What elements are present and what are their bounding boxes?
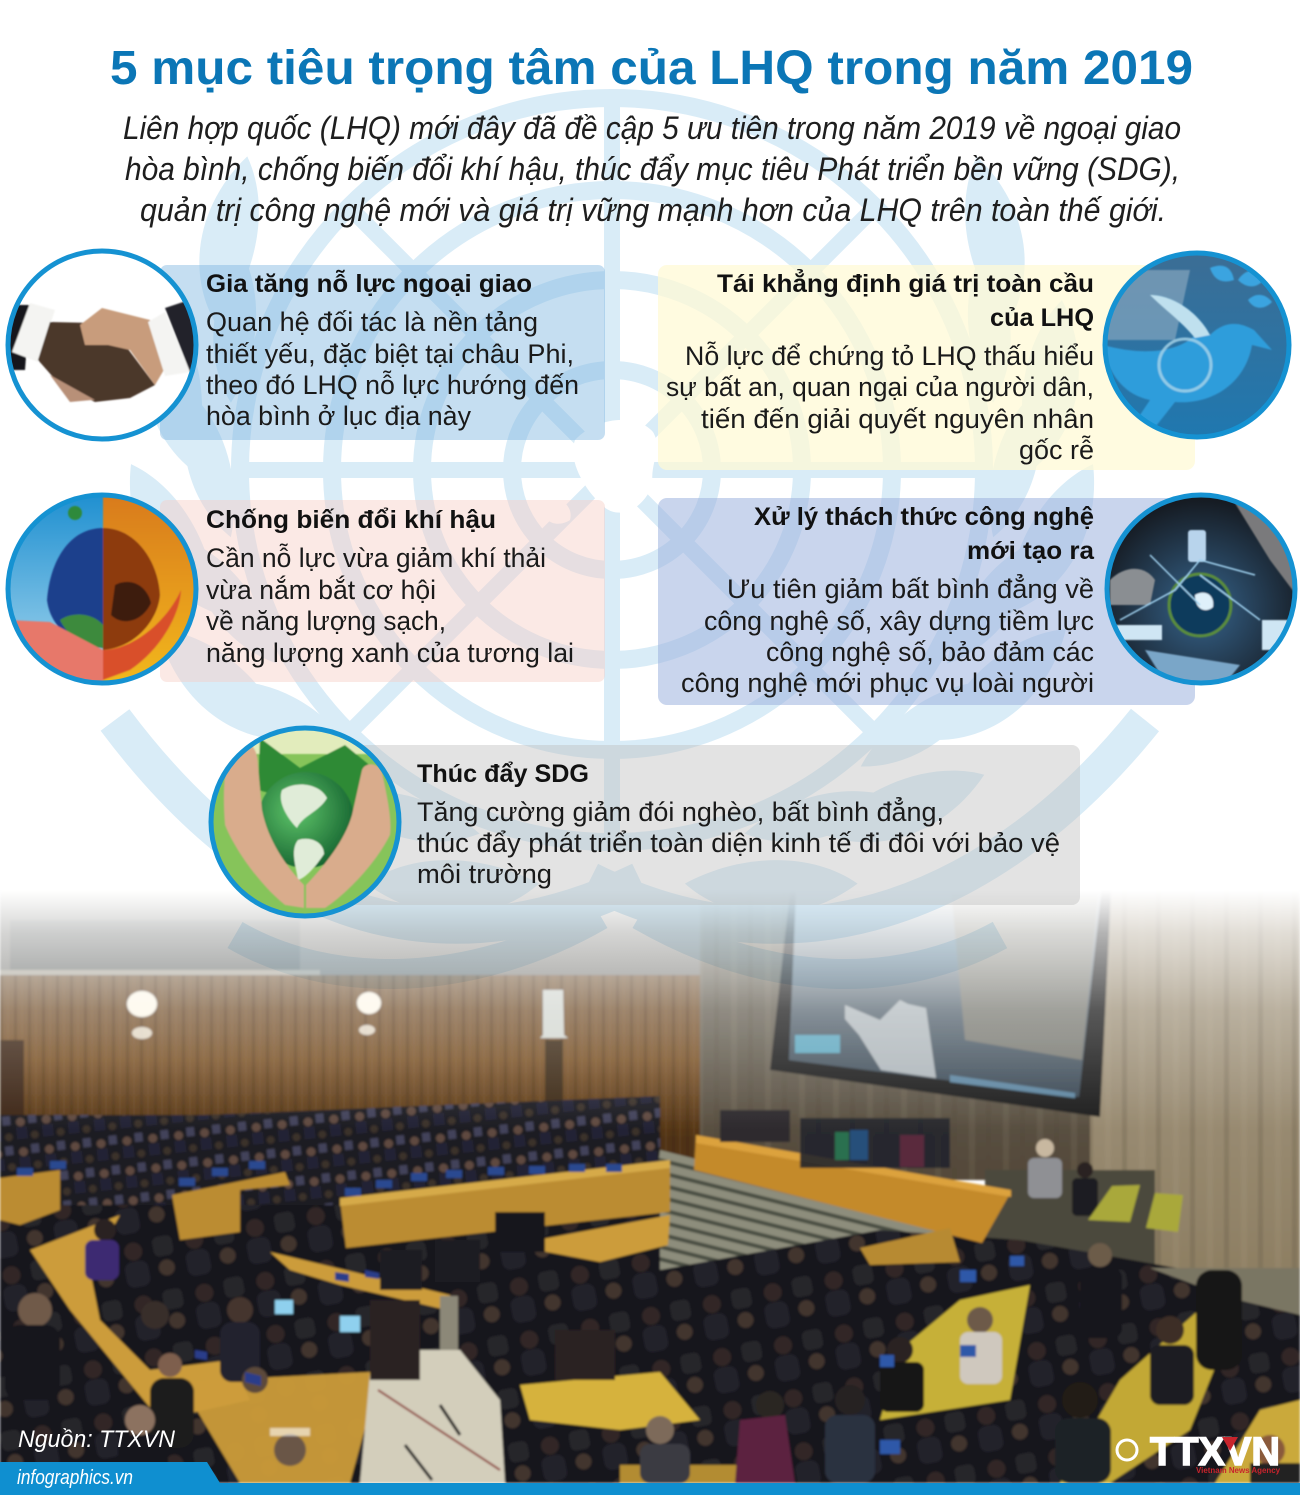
ceiling and balcony xyxy=(0,898,702,976)
heading: mới tạo ra xyxy=(967,537,1095,565)
main crowd base xyxy=(0,1205,660,1483)
seated speaker and lime chairs xyxy=(1028,1139,1183,1232)
intro paragraph xyxy=(123,110,1181,228)
card: Thúc đẩy SDG xyxy=(300,745,1080,905)
body text: vừa nắm bắt cơ hội xyxy=(206,574,436,605)
heading: Thúc đẩy SDG xyxy=(417,760,589,788)
heading: Tái khẳng định giá trị toàn cầu xyxy=(717,267,1094,298)
icon: hands holding green globe xyxy=(211,728,399,916)
head table xyxy=(694,1135,1011,1243)
projection screen xyxy=(770,880,1112,1117)
card: Chống biến đổi khí hậu xyxy=(160,500,605,682)
body text: theo đó LHQ nỗ lực hướng đến xyxy=(206,369,579,400)
footer bar xyxy=(0,1462,1300,1495)
mid left desks xyxy=(30,1215,670,1483)
floor aisle with stripes xyxy=(360,1350,505,1483)
intro paragraph: quản trị công nghệ mới và giá trị vững mạnh hơn của LHQ trên toàn thế giới. xyxy=(140,192,1166,228)
right curtain xyxy=(1090,880,1300,1290)
body text: Tăng cường giảm đói nghèo, bất bình đẳng, xyxy=(417,795,944,827)
back row crowd xyxy=(0,1115,660,1210)
photo: UN conference hall xyxy=(0,880,1300,1483)
card: Gia tăng nỗ lực ngoại giao xyxy=(160,265,605,440)
heading: Gia tăng nỗ lực ngoại giao xyxy=(206,268,532,298)
card: Xử lý thách thức công nghệ mới tạo ra xyxy=(658,498,1195,705)
body text: công nghệ số, bảo đảm các xyxy=(766,637,1094,667)
wood wall xyxy=(0,975,700,1165)
body text xyxy=(681,572,1094,698)
intro paragraph: Liên hợp quốc (LHQ) mới đây đã đề cập 5 ưu tiên trong năm 2019 về ngoại giao xyxy=(123,110,1181,146)
body text: thúc đẩy phát triển toàn diện kinh tế đi đôi với bảo vệ xyxy=(417,828,1060,858)
body text xyxy=(206,307,579,431)
desk monitors xyxy=(17,1161,622,1196)
body text xyxy=(206,542,574,668)
desk side panel xyxy=(440,1296,458,1370)
right wall behind the podium xyxy=(698,902,1092,1182)
background: UN emblem watermark xyxy=(115,95,1145,974)
icon: handshake xyxy=(0,251,205,439)
icon: peace dove xyxy=(1103,253,1289,440)
body text: sự bất an, quan ngại của người dân, xyxy=(666,372,1094,402)
body text: môi trường xyxy=(417,859,552,889)
front desks xyxy=(520,1228,1300,1483)
body text xyxy=(417,795,1060,889)
body text: tiến đến giải quyết nguyên nhân xyxy=(701,404,1094,434)
icon: earth half green half burning xyxy=(8,493,203,688)
card: Tái khẳng định giá trị toàn cầu của LHQ xyxy=(658,265,1195,470)
body text: năng lượng xanh của tương lai xyxy=(206,638,574,668)
statue xyxy=(540,990,568,1038)
floor behind desks xyxy=(658,1148,936,1271)
body text: Quan hệ đối tác là nền tảng xyxy=(206,307,538,337)
body text: Ưu tiên giảm bất bình đẳng về xyxy=(727,572,1094,604)
logo: TTXVN: Vietnam News Agency xyxy=(1196,1466,1281,1475)
intro paragraph: hòa bình, chống biến đổi khí hậu, thúc đẩy mục tiêu Phát triển bền vững (SDG), xyxy=(125,151,1180,187)
logo: TTXVN: TTXVN xyxy=(1150,1430,1280,1474)
area behind seated speaker xyxy=(985,1170,1155,1270)
heading: Chống biến đổi khí hậu xyxy=(206,506,496,534)
heading xyxy=(754,503,1095,565)
delegates xyxy=(5,1212,1300,1483)
back curved desks xyxy=(0,1162,670,1248)
heading: của LHQ xyxy=(990,304,1094,332)
hall lights xyxy=(127,991,381,1039)
heading: Xử lý thách thức công nghệ xyxy=(754,503,1094,531)
body text: công nghệ số, xây dựng tiềm lực xyxy=(704,606,1094,636)
source: Nguồn: TTXVN xyxy=(18,1426,176,1453)
website label: infographics.vn xyxy=(17,1467,133,1489)
heading xyxy=(717,267,1094,332)
title: 5 mục tiêu trọng tâm của LHQ trong năm 2019 xyxy=(110,42,1193,95)
body text: Nỗ lực để chứng tỏ LHQ thấu hiểu xyxy=(685,340,1094,371)
body text: công nghệ mới phục vụ loài người xyxy=(681,668,1094,698)
body text: về năng lượng sạch, xyxy=(206,606,446,636)
panelists at the head table xyxy=(720,1110,950,1168)
icon: digital technology globe xyxy=(1107,495,1300,690)
body text: Cần nỗ lực vừa giảm khí thải xyxy=(206,542,546,573)
body text: gốc rễ xyxy=(1019,434,1094,465)
body text: thiết yếu, đặc biệt tại châu Phi, xyxy=(206,339,574,369)
body text xyxy=(666,340,1094,465)
body text: hòa bình ở lục địa này xyxy=(206,401,471,431)
